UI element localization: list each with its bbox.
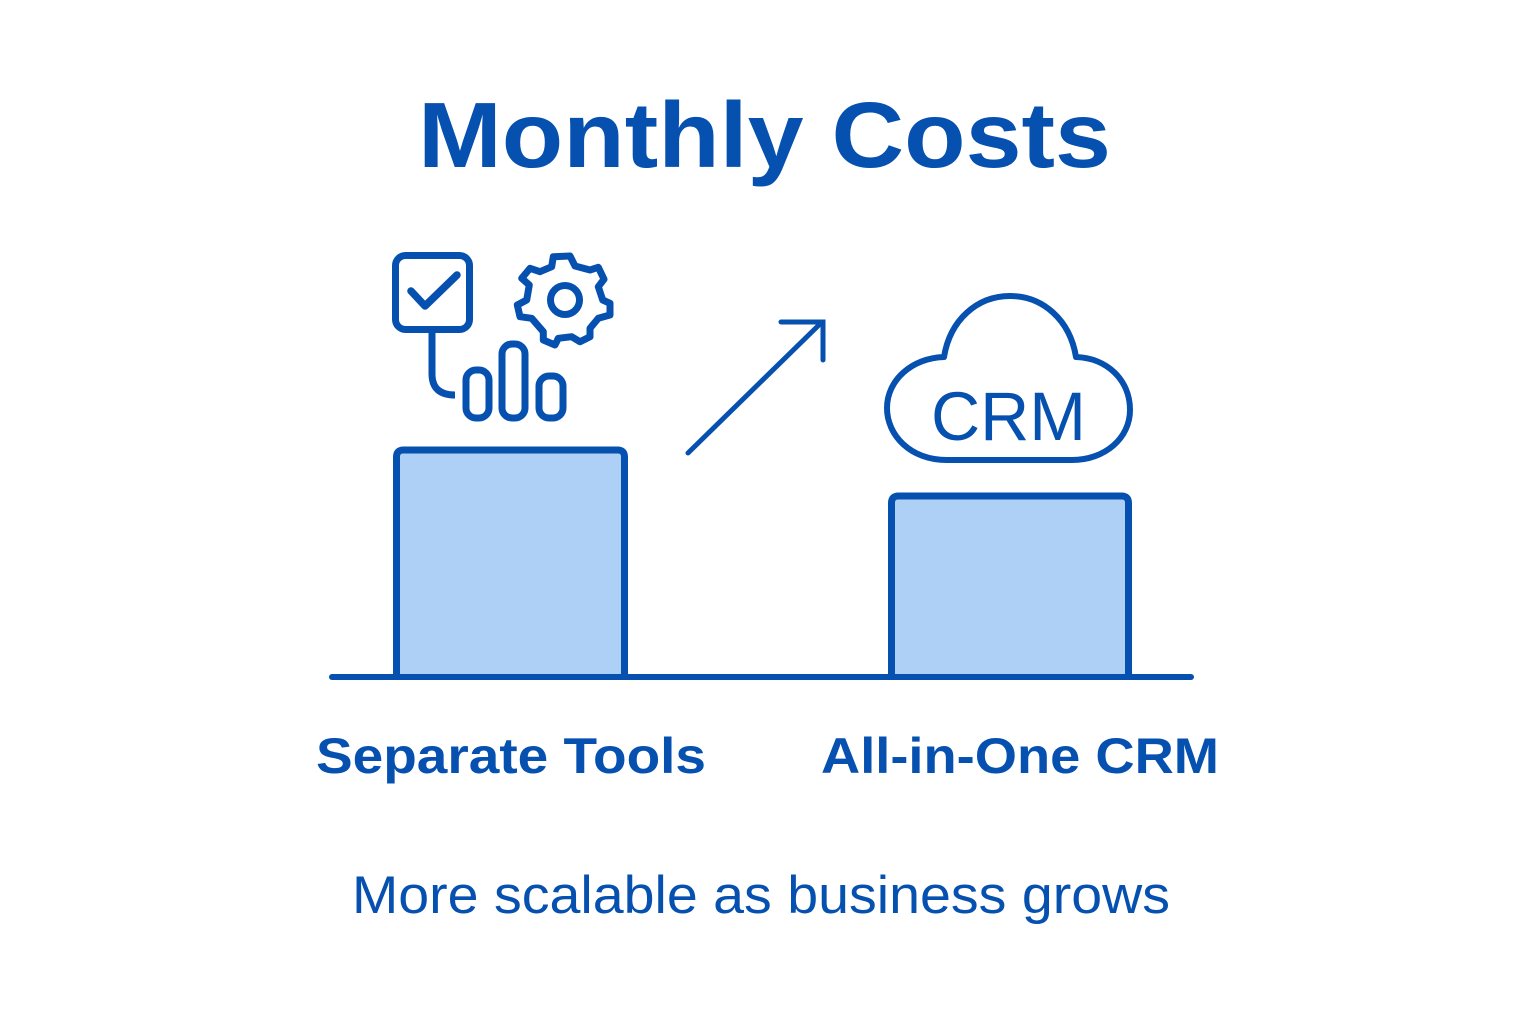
icon: CRM cloud: CRM (931, 378, 1086, 455)
icon: CRM cloud (887, 296, 1130, 460)
title: Monthly Costs (418, 83, 1111, 187)
bar: separate tools (396, 450, 624, 677)
arrow (688, 322, 823, 453)
chart baseline (332, 674, 1191, 680)
icon: checkbox with connector (396, 256, 470, 395)
bar: all-in-one CRM (892, 496, 1128, 677)
caption: More scalable as business grows (352, 866, 1170, 925)
label: all-in-one CRM: All-in-One CRM (821, 728, 1219, 784)
label: separate tools: Separate Tools (316, 728, 706, 784)
icon: small bar chart (466, 344, 563, 418)
icon: gear (517, 256, 610, 345)
